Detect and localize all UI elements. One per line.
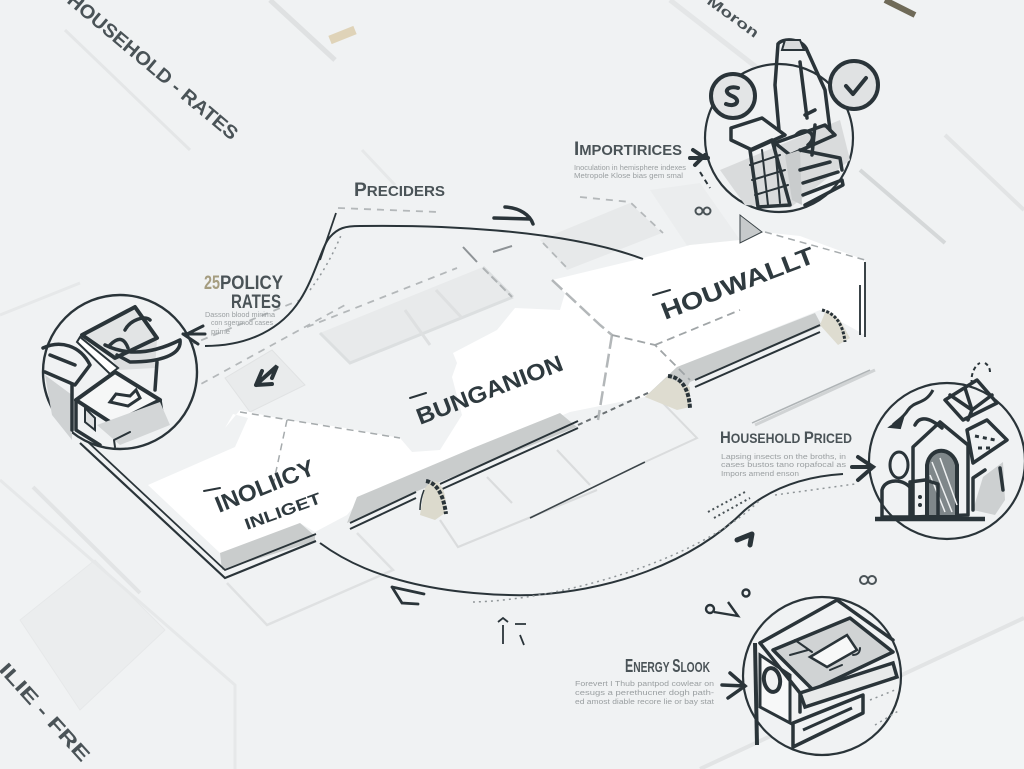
callout: 25 policy rates (204, 273, 283, 336)
callout: household priced: Impors amend enson (721, 471, 799, 478)
callout: household priced: HOUSEHOLD PRICED (720, 428, 852, 447)
flow curve: policy rates to importirices (205, 213, 643, 346)
side face: third block (645, 313, 822, 400)
callout: 25 policy rates: 25 (204, 273, 220, 294)
main white arrow (80, 215, 865, 578)
machine top (773, 618, 893, 690)
callout: 25 policy rates: RATES (231, 292, 281, 313)
callout: household priced (720, 428, 852, 478)
label: Inoliicy Inliget: INLIGET (243, 490, 324, 534)
arrow into policy circle (183, 326, 205, 344)
callout: household priced: Lapsing insects on the broths, in (721, 454, 846, 461)
side face: first block (220, 523, 315, 570)
callout: 25 policy rates: POLICY (220, 273, 283, 294)
label: Bunganion: BUNGANION (412, 350, 566, 430)
arrow into importirices circle (690, 150, 708, 165)
heading: preciders: PRECIDERS (354, 180, 445, 201)
callout: energy slook: ENERGY SLOOK (625, 656, 710, 676)
glyph: loop near energy (706, 590, 750, 616)
callout: energy slook: cesugs a perethucner dogh path- (575, 690, 715, 697)
callout: 25 policy rates: Dasson blood minima (205, 312, 275, 319)
arrow: lower right marker (737, 534, 752, 545)
pencil (775, 40, 830, 130)
label: Inoliicy Inliget (204, 454, 324, 534)
callout: importirices: Inoculation in hemisphere indexes (574, 165, 687, 172)
arrow into energy circle (722, 673, 745, 698)
squiggle arrow (893, 390, 933, 425)
arrow: top sweep (494, 207, 533, 224)
building (731, 118, 785, 150)
glyph: figure eights (696, 208, 876, 584)
machine body (755, 643, 757, 745)
connector caps on arrow (420, 310, 850, 520)
arrow edge lines (80, 443, 316, 578)
callout: energy slook: Forevert I Thub pantpod cowlear on (575, 681, 714, 688)
parcel (945, 380, 997, 420)
arrow: lower left chevron (392, 587, 424, 604)
flow curve: inoliicy to household priced (320, 474, 855, 602)
house (913, 422, 968, 517)
dollar coin (711, 74, 755, 118)
arrow: plan marker (256, 366, 277, 385)
callout: 25 policy rates: con sgenmod cases (211, 320, 273, 327)
people (882, 481, 912, 517)
callout: importirices: Metropole Klose bias gem smal (574, 173, 683, 180)
callout: importirices: IMPORTIRICES (574, 139, 682, 160)
icon circle: importirices (705, 40, 878, 212)
callout: 25 policy rates: prime (211, 329, 230, 336)
check coin (830, 61, 878, 109)
arrow: up marker (498, 618, 526, 645)
icon circle: policy rates (43, 295, 197, 449)
label: Inoliicy Inliget: INOLIICY (211, 454, 318, 518)
side face: second block (347, 413, 577, 523)
dotted dashes near household (708, 492, 750, 518)
arrow into household circle (852, 457, 873, 480)
label: Houwallt: HOUWALLT (657, 242, 819, 326)
icon circle: household priced (869, 363, 1024, 539)
callout: energy slook (575, 656, 715, 706)
callout: energy slook: ed amost diable recore lie or bay stat (575, 699, 714, 706)
callout: importirices (574, 139, 687, 180)
icon circle: energy slook (743, 597, 901, 755)
callout: household priced: cases bustos tano ropafocal as (721, 462, 847, 469)
